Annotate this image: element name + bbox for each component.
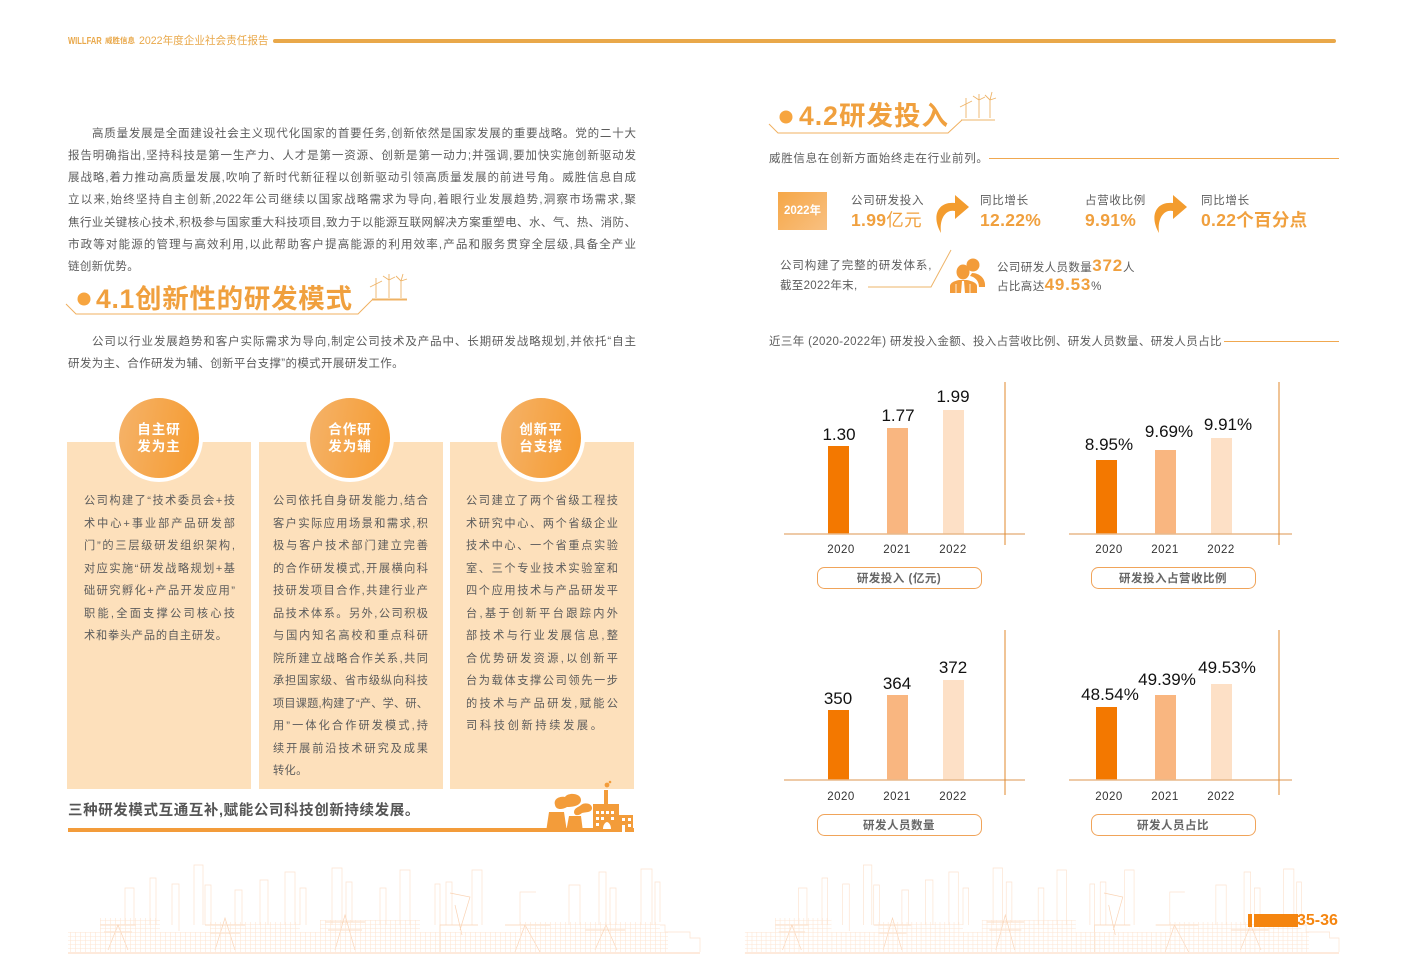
panel: 创新平台支撑: 室、三个专业技术实验室和 xyxy=(466,563,618,575)
bar chart: 研发投入(亿元): 2020 xyxy=(827,544,855,556)
panel: 合作研发为辅: 转化。 xyxy=(273,765,308,777)
stat: growth: 同比增长 xyxy=(980,195,1029,207)
stat: point growth: 同比增长 xyxy=(1201,195,1250,207)
icon: wind turbines xyxy=(960,92,996,120)
bar chart: 研发人员占比: 研发人员占比 xyxy=(1137,818,1209,832)
header logo: WILLFAR xyxy=(68,36,102,47)
panel: 合作研发为辅: 公司依托自身研发能力,结合 xyxy=(273,495,428,507)
2022 key figures xyxy=(778,192,1307,233)
bar chart: 研发人员数量: 372 xyxy=(939,658,967,677)
bar chart: 研发人员占比: 48.54% xyxy=(1081,685,1139,704)
badge: 创新平台支撑 xyxy=(497,394,585,482)
page header xyxy=(68,34,1336,47)
staff share: 占比高达49.53% xyxy=(997,275,1102,294)
staffing statement: 截至2022年末, xyxy=(780,280,857,292)
panel: 自主研发为主 xyxy=(67,442,251,789)
panel: 合作研发为辅: 品技术体系。另外,公司积极 xyxy=(273,608,428,620)
stat: point growth xyxy=(1201,194,1307,230)
stat: R&D investment xyxy=(851,194,924,230)
heading: 4.1 xyxy=(66,274,408,314)
badge: 合作研发为辅 xyxy=(306,394,394,482)
bar chart: 研发投入占营收比例: 8.95% xyxy=(1085,435,1133,454)
staffing statement: 公司构建了完整的研发体系, xyxy=(780,260,932,272)
panel: 合作研发为辅: 客户实际应用场景和需求,积 xyxy=(273,518,428,530)
bar chart: 研发投入(亿元): 2021 xyxy=(883,544,911,556)
header logo Chinese name: 威胜信息 xyxy=(105,36,135,45)
icon: arrow xyxy=(1154,195,1187,233)
badge: 自主研发为主 xyxy=(115,394,203,482)
icon: people xyxy=(950,258,986,293)
stat: share of revenue xyxy=(1085,194,1146,230)
bar chart: 研发投入占营收比例: 2022 xyxy=(1207,544,1235,556)
intro paragraph: 立以来,始终坚持自主创新,2022年公司继续以国家战略需求为导向,着眼行业发展趋势,洞察市场需求,聚 xyxy=(68,194,636,206)
panel: 合作研发为辅 xyxy=(259,442,443,789)
bar chart: 研发投入(亿元): 1.99 xyxy=(936,387,970,406)
bar chart: 研发投入(亿元) xyxy=(784,382,1025,589)
panel: 创新平台支撑: 的技术与产品研发,赋能公 xyxy=(466,698,618,710)
bar chart: 研发人员数量: 2022 xyxy=(939,791,967,803)
panel: 自主研发为主: 公司构建了“技术委员会+技 xyxy=(84,495,235,507)
heading: 4.2 xyxy=(768,92,996,134)
panel: 创新平台支撑: 术研究中心、两个省级企业 xyxy=(466,518,618,530)
panel: 合作研发为辅: 项目课题,构建了“产、学、研、 xyxy=(273,698,428,710)
panel: 自主研发为主: 术中心+事业部产品研发部 xyxy=(84,518,235,530)
intro paragraph xyxy=(68,127,636,273)
panel: 创新平台支撑 xyxy=(450,442,634,789)
bar chart: 研发人员占比: 49.53% xyxy=(1198,658,1256,677)
stat: share of revenue: 9.91% xyxy=(1085,210,1136,230)
bar chart: 研发投入(亿元): 1.30 xyxy=(822,425,856,444)
badge: 自主研发为主: 发为主 xyxy=(137,439,181,454)
intro paragraph: 市政等对能源的管理与高效利用,以此帮助客户提高能源的利用效率,产品和服务贯穿全层级,具备全产业 xyxy=(68,239,636,251)
panel: 自主研发为主: 职能,全面支撑公司核心技 xyxy=(84,608,235,620)
panel: 自主研发为主: 础研究孵化+产品开发应用” xyxy=(84,585,235,597)
header title: 2022年度企业社会责任报告 xyxy=(139,35,269,47)
panel: 合作研发为辅: 极与客户技术部门建立完善 xyxy=(273,540,428,552)
bar chart: 研发投入占营收比例: 9.69% xyxy=(1145,422,1193,441)
bar chart: 研发人员占比 xyxy=(1069,630,1292,836)
page number xyxy=(1248,912,1338,929)
panel: 合作研发为辅: 技研发项目合作,共建行业产 xyxy=(273,585,428,597)
stat: R&D investment: 公司研发投入 xyxy=(851,195,924,207)
summary statement: 三种研发模式互通互补,赋能公司科技创新持续发展。 xyxy=(68,803,420,819)
bar chart: 研发人员占比: 2022 xyxy=(1207,791,1235,803)
panel: 创新平台支撑: 合优势研发资源,以创新平 xyxy=(466,653,618,665)
header rule xyxy=(273,39,1336,43)
panel: 合作研发为辅: 续开展前沿技术研究及成果 xyxy=(273,743,428,755)
panel: 自主研发为主: 门”的三层级研发组织架构, xyxy=(84,540,235,552)
intro paragraph: 报告明确指出,坚持科技是第一生产力、人才是第一资源、创新是第一动力;并强调,要加快实施创新驱动发 xyxy=(68,150,636,162)
stat: share of revenue: 占营收比例 xyxy=(1085,195,1146,207)
panel: 合作研发为辅: 承担国家级、省市级纵向科技 xyxy=(273,675,428,687)
stat: R&D investment: 1.99亿元 xyxy=(851,210,922,230)
paragraph: 4.1 intro xyxy=(68,335,636,370)
bar chart: 研发投入(亿元): 1.77 xyxy=(881,406,915,425)
bar chart: 研发投入(亿元): 研发投入 (亿元) xyxy=(857,571,941,585)
chart section title with rule: 近三年 (2020-2022年) 研发投入金额、投入占营收比例、研发人员数量、研发人员占比 xyxy=(769,336,1222,348)
panel: 创新平台支撑: 四个应用技术与产品研发平 xyxy=(466,585,618,597)
badge: 创新平台支撑: 台支撑 xyxy=(519,439,563,454)
panel: 创新平台支撑: 公司建立了两个省级工程技 xyxy=(466,495,618,507)
stat: point growth: 0.22个百分点 xyxy=(1201,210,1307,230)
badge: 合作研发为辅: 合作研 xyxy=(328,422,372,437)
bar chart: 研发人员数量: 2021 xyxy=(883,791,911,803)
bar chart: 研发人员数量: 350 xyxy=(824,689,852,708)
panel: 创新平台支撑: 部技术与行业发展信息,整 xyxy=(466,630,618,642)
intro paragraph: 链创新优势。 xyxy=(68,261,139,273)
badge: 合作研发为辅: 发为辅 xyxy=(328,439,372,454)
icon: arrow xyxy=(936,195,969,233)
bar chart: 研发投入(亿元): 2022 xyxy=(939,544,967,556)
stat: growth xyxy=(980,194,1041,230)
panel: 自主研发为主: 术和拳头产品的自主研发。 xyxy=(84,630,227,642)
year tag xyxy=(778,192,827,230)
panel: 创新平台支撑: 司科技创新持续发展。 xyxy=(466,720,602,732)
bar chart: 研发投入占营收比例: 研发投入占营收比例 xyxy=(1119,571,1227,585)
bar chart: 研发人员数量 xyxy=(784,630,1025,836)
bar chart: 研发投入占营收比例 xyxy=(1069,382,1292,589)
panel: 创新平台支撑: 台,基于创新平台跟踪内外 xyxy=(466,608,618,620)
bar chart: 研发人员占比: 2020 xyxy=(1095,791,1123,803)
intro paragraph: 焦行业关键核心技术,积极参与国家重大科技项目,致力于以能源互联网解决方案重塑电、水、气、热、消防、 xyxy=(68,217,636,229)
callout line xyxy=(868,250,952,288)
heading: 4.2: 4.2研发投入 xyxy=(799,101,948,131)
panel: 创新平台支撑: 技术中心、一个省重点实验 xyxy=(466,540,618,552)
badge: 自主研发为主: 自主研 xyxy=(137,422,181,437)
bar chart: 研发投入占营收比例: 2020 xyxy=(1095,544,1123,556)
heading: 4.1: 4.1创新性的研发模式 xyxy=(96,284,352,314)
stat: growth: 12.22% xyxy=(980,210,1041,230)
paragraph: 4.1 intro: 公司以行业发展趋势和客户实际需求为导向,制定公司技术及产品中、长期研发战略规划,并依托“自主 xyxy=(92,336,636,348)
bar chart: 研发人员数量: 2020 xyxy=(827,791,855,803)
intro paragraph: 展战略,着力推动高质量发展,吹响了新时代新征程以创新驱动引领高质量发展的前进号角。威胜信息自成 xyxy=(68,172,636,184)
paragraph: 4.1 intro: 研发为主、合作研发为辅、创新平台支撑”的模式开展研发工作。 xyxy=(68,358,404,370)
panel: 自主研发为主: 对应实施“研发战略规划+基 xyxy=(84,563,235,575)
bar chart: 研发投入占营收比例: 2021 xyxy=(1151,544,1179,556)
icon: wind turbines xyxy=(370,274,407,299)
panel: 合作研发为辅: 的合作研发模式,开展横向科 xyxy=(273,563,428,575)
page number: 35-36 xyxy=(1297,912,1338,929)
panel: 合作研发为辅: 用”一体化合作研发模式,持 xyxy=(273,720,428,732)
badge: 创新平台支撑: 创新平 xyxy=(519,422,563,437)
intro paragraph: 高质量发展是全面建设社会主义现代化国家的首要任务,创新依然是国家发展的重要战略。党的二十大 xyxy=(92,128,636,140)
staff count: 公司研发人员数量372人 xyxy=(997,256,1135,275)
bar chart: 研发人员占比: 2021 xyxy=(1151,791,1179,803)
summary underline and factory icon xyxy=(68,780,634,832)
staffing statement xyxy=(780,250,1135,294)
panel: 创新平台支撑: 台为载体支撑公司领先一步 xyxy=(466,675,618,687)
bar chart: 研发人员数量: 364 xyxy=(883,674,911,693)
panel: 合作研发为辅: 与国内知名高校和重点科研 xyxy=(273,630,428,642)
bar chart: 研发人员占比: 49.39% xyxy=(1138,670,1196,689)
statement with rule: 威胜信息在创新方面始终走在行业前列。 xyxy=(769,153,989,165)
year tag: 2022年 xyxy=(784,205,821,217)
bar chart: 研发人员数量: 研发人员数量 xyxy=(863,818,935,832)
bar chart: 研发投入占营收比例: 9.91% xyxy=(1204,415,1252,434)
panel: 合作研发为辅: 院所建立战略合作关系,共同 xyxy=(273,653,428,665)
